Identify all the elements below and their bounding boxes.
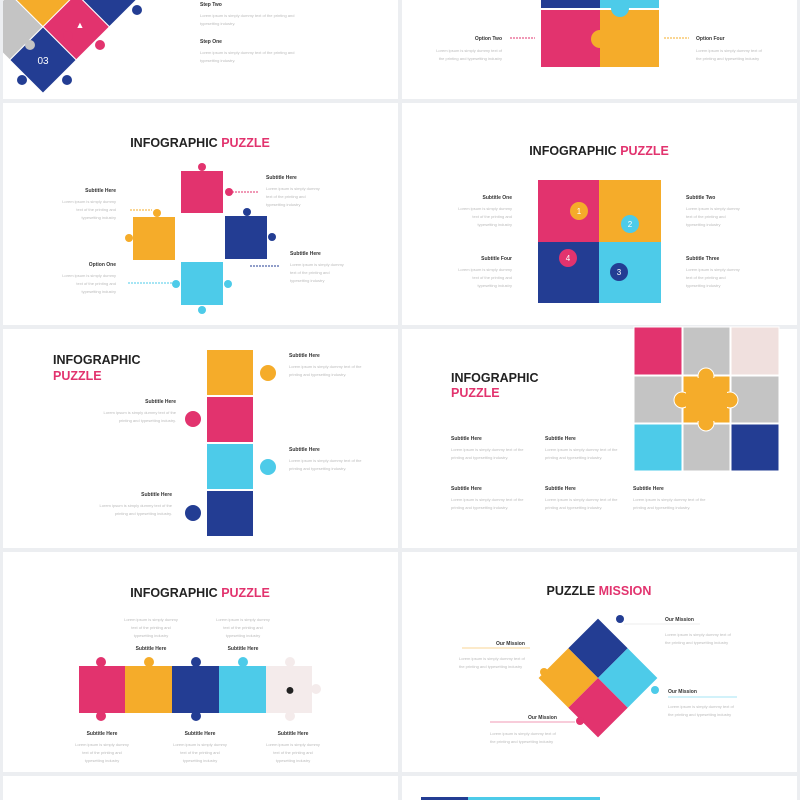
panel: numbered 2x2: Lorem ipsum is simply dummy <box>686 267 740 272</box>
panel: vertical stack: printing and typesetting industry. <box>119 418 176 423</box>
panel: horizontal row: ● <box>285 682 295 699</box>
panel: horizontal row: Lorem ipsum is simply dummy <box>75 742 129 747</box>
panel: numbered 2x2: Lorem ipsum is simply dummy <box>458 206 512 211</box>
panel: vertical stack: Lorem ipsum is simply dummy text of the <box>100 503 173 508</box>
panel: numbered 2x2: 4 <box>566 254 571 263</box>
panel: horizontal row: Lorem ipsum is simply dummy <box>173 742 227 747</box>
panel: numbered 2x2: text of the printing and <box>686 275 726 280</box>
panel: diagonal steps: ▲ <box>76 20 84 30</box>
panel: horizontal row: Subtitle Here <box>87 731 118 737</box>
panel: numbered 2x2: text of the printing and <box>472 275 512 280</box>
panel: numbered 2x2: typesetting industry <box>686 222 720 227</box>
panel: horizontal row: text of the printing and <box>273 750 313 755</box>
panel: cross puzzle: typesetting industry <box>266 202 300 207</box>
panel: cross puzzle: Subtitle Here <box>290 251 321 257</box>
panel: vertical stack: printing and typesetting industry. <box>115 511 172 516</box>
panel: horizontal row: typesetting industry <box>226 633 260 638</box>
panel: diagonal steps: 03 <box>37 56 49 67</box>
panel: 2x2 options: Lorem ipsum is simply dummy text of <box>696 48 763 53</box>
panel: puzzle mission: the printing and typesetting industry <box>665 640 728 645</box>
panel: puzzle mission: Lorem ipsum is simply dummy text of <box>665 632 732 637</box>
panel: 3x3 grid: printing and typesetting industry. <box>633 505 690 510</box>
panel: puzzle mission: Our Mission <box>665 617 694 623</box>
panel: numbered 2x2: Lorem ipsum is simply dummy <box>686 206 740 211</box>
panel: numbered 2x2: Subtitle One <box>483 195 512 201</box>
panel: cross puzzle: Lorem ipsum is simply dummy <box>62 273 116 278</box>
panel: puzzle mission: Lorem ipsum is simply dummy text of <box>668 704 735 709</box>
panel: cross puzzle: typesetting industry <box>82 289 116 294</box>
panel: 3x3 grid: Lorem ipsum is simply dummy text of the <box>451 447 524 452</box>
panel: numbered 2x2: Lorem ipsum is simply dummy <box>458 267 512 272</box>
panel: horizontal row: typesetting industry <box>183 758 217 763</box>
panel: horizontal row: Lorem ipsum is simply dummy <box>266 742 320 747</box>
panel: horizontal row: text of the printing and <box>82 750 122 755</box>
panel: diagonal steps: typesetting industry. <box>200 58 235 63</box>
panel: horizontal row: typesetting industry <box>85 758 119 763</box>
panel: puzzle mission: Our Mission <box>496 641 525 647</box>
panel: puzzle mission: Lorem ipsum is simply dummy text of <box>459 656 526 661</box>
panel: cross puzzle: INFOGRAPHIC PUZZLE <box>130 136 270 150</box>
panel: cross puzzle: Option One <box>89 262 116 268</box>
panel: puzzle mission: Lorem ipsum is simply dummy text of <box>490 731 557 736</box>
panel: cross puzzle: text of the printing and <box>76 281 116 286</box>
panel: vertical stack: Subtitle Here <box>289 353 320 359</box>
panel: vertical stack: Lorem ipsum is simply dummy text of the <box>289 364 362 369</box>
panel: cross puzzle: typesetting industry <box>82 215 116 220</box>
panel: 3x3 grid: Lorem ipsum is simply dummy text of the <box>545 447 618 452</box>
panel: cross puzzle: Subtitle Here <box>85 188 116 194</box>
panel: 3x3 grid: Lorem ipsum is simply dummy text of the <box>451 497 524 502</box>
panel: numbered 2x2: Subtitle Four <box>481 256 512 262</box>
panel: diagonal steps: Step Two <box>200 2 222 8</box>
panel: cross puzzle <box>62 136 344 314</box>
panel: horizontal row: Lorem ipsum is simply dummy <box>216 617 270 622</box>
panel: puzzle mission: the printing and typesetting industry <box>459 664 522 669</box>
panel: cross puzzle: Lorem ipsum is simply dummy <box>290 262 344 267</box>
panel: numbered 2x2: typesetting industry <box>686 283 720 288</box>
panel: horizontal row: Lorem ipsum is simply dummy <box>124 617 178 622</box>
panel: vertical stack: Subtitle Here <box>289 447 320 453</box>
panel: vertical stack <box>53 350 362 536</box>
panel: puzzle mission <box>459 584 737 744</box>
panel: cross puzzle: text of the printing and <box>76 207 116 212</box>
panel: 3x3 grid: Lorem ipsum is simply dummy text of the <box>545 497 618 502</box>
panel: vertical stack: Subtitle Here <box>141 492 172 498</box>
panel: cross puzzle: Subtitle Here <box>266 175 297 181</box>
panel: numbered 2x2: typesetting industry <box>478 283 512 288</box>
panel: 3x3 grid: Subtitle Here <box>545 436 576 442</box>
panel: vertical stack: Subtitle Here <box>145 399 176 405</box>
panel: diagonal steps <box>0 0 294 99</box>
panel: horizontal row: INFOGRAPHIC PUZZLE <box>130 586 270 600</box>
panel: vertical stack: PUZZLE <box>53 369 102 383</box>
panel: diagonal steps: Step One <box>200 39 222 45</box>
panel: 3x3 grid: Subtitle Here <box>633 486 664 492</box>
panel: vertical stack: printing and typesetting industry. <box>289 466 346 471</box>
panel: numbered 2x2: 3 <box>617 268 622 277</box>
panel: horizontal row: text of the printing and <box>223 625 263 630</box>
panel: 3x3 grid: Lorem ipsum is simply dummy text of the <box>633 497 706 502</box>
panel: horizontal row: typesetting industry <box>134 633 168 638</box>
panel: numbered 2x2: 2 <box>628 220 633 229</box>
panel: numbered 2x2: text of the printing and <box>472 214 512 219</box>
panel: 3x3 grid: printing and typesetting industry. <box>451 505 508 510</box>
panel: horizontal row: Subtitle Here <box>136 646 167 652</box>
panel: vertical stack: INFOGRAPHIC <box>53 353 140 367</box>
bottom bar <box>421 797 600 800</box>
panel: numbered 2x2: Subtitle Two <box>686 195 715 201</box>
panel: 2x2 options: Option Four <box>696 36 725 42</box>
panel: vertical stack: Lorem ipsum is simply dummy text of the <box>289 458 362 463</box>
panel: puzzle mission: Our Mission <box>668 689 697 695</box>
panel: diagonal steps: typesetting industry. <box>200 21 235 26</box>
panel: puzzle mission: Our Mission <box>528 715 557 721</box>
panel: vertical stack: Lorem ipsum is simply dummy text of the <box>104 410 177 415</box>
panel: cross puzzle: text of the printing and <box>266 194 306 199</box>
panel: horizontal row: text of the printing and <box>180 750 220 755</box>
panel: numbered 2x2: Subtitle Three <box>686 256 720 262</box>
panel: 3x3 grid: INFOGRAPHIC <box>451 371 538 385</box>
panel: cross puzzle: Lorem ipsum is simply dummy <box>62 199 116 204</box>
panel: 3x3 grid: Subtitle Here <box>451 486 482 492</box>
panel: 2x2 options <box>436 0 763 67</box>
panel: 2x2 options: Lorem ipsum is simply dummy text of <box>436 48 503 53</box>
panel: numbered 2x2: typesetting industry <box>478 222 512 227</box>
panel: 3x3 grid: printing and typesetting industry. <box>545 455 602 460</box>
panel: 3x3 grid: Subtitle Here <box>451 436 482 442</box>
panel: horizontal row: Subtitle Here <box>185 731 216 737</box>
panel: numbered 2x2: INFOGRAPHIC PUZZLE <box>529 144 669 158</box>
panel: numbered 2x2: text of the printing and <box>686 214 726 219</box>
panel: puzzle mission: PUZZLE MISSION <box>547 584 651 598</box>
panel: diagonal steps: Lorem ipsum is simply dummy text of the printing and <box>200 13 294 18</box>
panel: numbered 2x2 <box>458 144 740 303</box>
panel: 3x3 grid <box>451 327 779 510</box>
panel: cross puzzle: Lorem ipsum is simply dummy <box>266 186 320 191</box>
panel: horizontal row: text of the printing and <box>131 625 171 630</box>
panel: puzzle mission: the printing and typesetting industry <box>668 712 731 717</box>
panel: horizontal row: Subtitle Here <box>278 731 309 737</box>
panel: cross puzzle: text of the printing and <box>290 270 330 275</box>
panel: 2x2 options: the printing and typesetting industry <box>439 56 502 61</box>
panel: numbered 2x2: 1 <box>577 207 582 216</box>
panel: 2x2 options: the printing and typesetting industry <box>696 56 759 61</box>
panel: horizontal row: typesetting industry <box>276 758 310 763</box>
panel: 3x3 grid: printing and typesetting industry. <box>545 505 602 510</box>
panel: 2x2 options: Option Two <box>475 36 502 42</box>
panel: vertical stack: printing and typesetting industry. <box>289 372 346 377</box>
panel: puzzle mission: the printing and typesetting industry <box>490 739 553 744</box>
panel: 3x3 grid: printing and typesetting industry. <box>451 455 508 460</box>
panel: horizontal row: Subtitle Here <box>228 646 259 652</box>
panel: diagonal steps: Lorem ipsum is simply dummy text of the printing and <box>200 50 294 55</box>
panel: 3x3 grid: Subtitle Here <box>545 486 576 492</box>
panel: horizontal row <box>75 586 321 763</box>
panel: cross puzzle: typesetting industry <box>290 278 324 283</box>
panel: 3x3 grid: PUZZLE <box>451 386 500 400</box>
